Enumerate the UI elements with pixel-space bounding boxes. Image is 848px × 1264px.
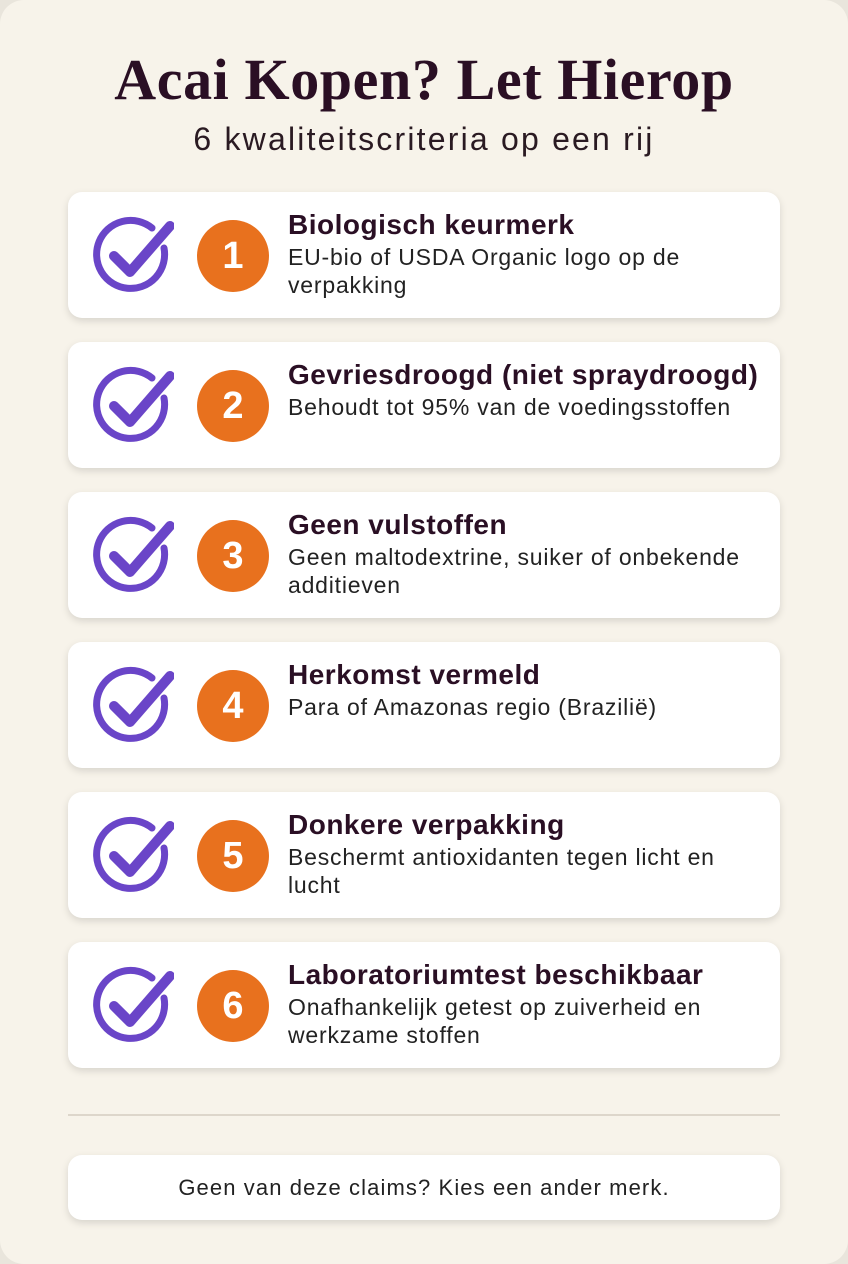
subtitle: 6 kwaliteitscriteria op een rij (193, 121, 655, 157)
icon: check (93, 816, 174, 892)
number badge (197, 370, 269, 442)
text: Geen maltodextrine, suiker of onbekende additieven (288, 544, 740, 598)
text: Para of Amazonas regio (Brazilië) (288, 694, 657, 720)
title: Acai Kopen? Let Hierop (114, 47, 734, 112)
text (288, 959, 703, 1048)
card 2 (68, 342, 780, 468)
text: EU-bio of USDA Organic logo op de verpakking (288, 244, 680, 298)
text: Behoudt tot 95% van de voedingsstoffen (288, 394, 731, 420)
text: Geen vulstoffen (288, 509, 507, 540)
text: Laboratoriumtest beschikbaar (288, 959, 703, 990)
number badge (197, 970, 269, 1042)
card 6 (68, 942, 780, 1068)
text: Biologisch keurmerk (288, 209, 574, 240)
text (288, 509, 740, 598)
text (288, 359, 758, 420)
number badge: 6 (222, 985, 244, 1027)
icon: check (93, 966, 174, 1042)
icon: check (93, 216, 174, 292)
card 5 (68, 792, 780, 918)
text (288, 209, 680, 298)
text: lucht (288, 872, 341, 898)
card 1 (68, 192, 780, 318)
number badge (197, 670, 269, 742)
number badge: 4 (222, 685, 244, 727)
number badge (197, 220, 269, 292)
text: Onafhankelijk getest op zuiverheid en (288, 994, 701, 1020)
number badge: 5 (222, 835, 244, 877)
number badge: 1 (222, 235, 244, 277)
footer callout: Geen van deze claims? Kies een ander merk. (178, 1175, 670, 1200)
number badge (197, 820, 269, 892)
icon: check (93, 666, 174, 742)
card 4 (68, 642, 780, 768)
icon: check (93, 366, 174, 442)
icon: check (93, 516, 174, 592)
text (288, 659, 657, 720)
text: Herkomst vermeld (288, 659, 540, 690)
text: Gevriesdroogd (niet spraydroogd) (288, 359, 758, 390)
number badge (197, 520, 269, 592)
text (288, 809, 715, 898)
text: werkzame stoffen (288, 1022, 481, 1048)
text: Beschermt antioxidanten tegen licht en (288, 844, 715, 870)
footer callout (68, 1155, 780, 1220)
text: Donkere verpakking (288, 809, 565, 840)
card 3 (68, 492, 780, 618)
number badge: 2 (222, 385, 244, 427)
number badge: 3 (222, 535, 244, 577)
